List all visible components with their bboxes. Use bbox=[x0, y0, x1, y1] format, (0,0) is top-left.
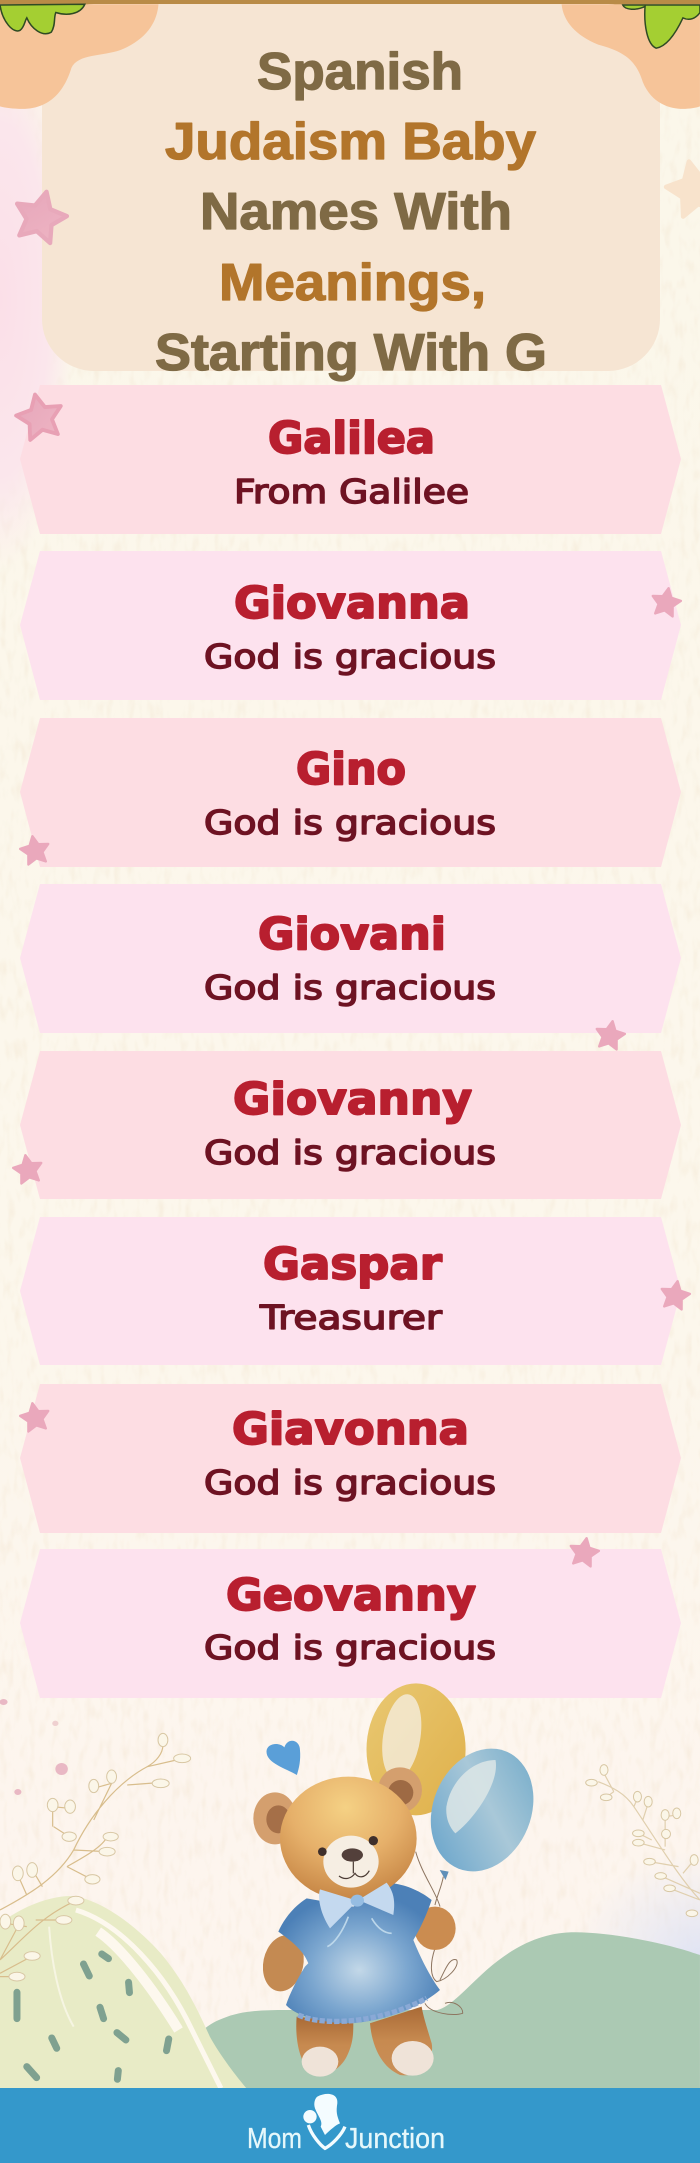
icon: blue heart bbox=[267, 1741, 300, 1775]
star: Gaspar bbox=[659, 1279, 692, 1310]
name: Gaspar bbox=[263, 1239, 442, 1290]
name: Giovanna bbox=[234, 578, 470, 629]
star: Galilea bbox=[13, 390, 66, 442]
hill dashes bbox=[17, 1954, 169, 2079]
eyes bbox=[318, 1847, 327, 1856]
icon: mother and child bbox=[303, 2094, 345, 2148]
panel: Giavonna bbox=[20, 1384, 681, 1533]
panel: Giovani bbox=[20, 884, 681, 1033]
mouth bbox=[339, 1862, 369, 1879]
star: Geovanny bbox=[568, 1536, 601, 1567]
name: Geovanny bbox=[226, 1570, 476, 1621]
star: Giovanny bbox=[11, 1153, 44, 1184]
title bbox=[155, 43, 547, 382]
meaning: From Galilee bbox=[234, 472, 469, 511]
star: Giovanna bbox=[650, 586, 683, 617]
meaning: God is gracious bbox=[204, 968, 496, 1007]
branch right bbox=[586, 1765, 700, 1917]
meaning: God is gracious bbox=[204, 803, 496, 842]
hill: dark green bbox=[192, 1932, 700, 2088]
panel: Galilea bbox=[20, 385, 681, 534]
name: Giovanny bbox=[233, 1074, 472, 1125]
name: Gino bbox=[296, 744, 406, 795]
arms bbox=[258, 1931, 309, 1995]
title: Spanish bbox=[257, 43, 463, 101]
meaning: Treasurer bbox=[259, 1298, 443, 1337]
star: title right bbox=[662, 156, 700, 219]
balloon strings bbox=[416, 1852, 463, 2015]
blue balloon bbox=[418, 1742, 546, 1880]
yellow balloon bbox=[366, 1683, 466, 1815]
leaves right bbox=[623, 5, 700, 48]
logo: MomJunction bbox=[247, 2094, 445, 2155]
dress bbox=[278, 1883, 440, 2023]
star: Giavonna bbox=[18, 1401, 51, 1432]
footer bar bbox=[0, 2088, 700, 2163]
title: Starting With G bbox=[155, 324, 547, 382]
star: Gino bbox=[18, 834, 51, 865]
dots bbox=[0, 1699, 68, 1795]
meaning: God is gracious bbox=[204, 1463, 496, 1502]
logo: MomJunction: Junction bbox=[345, 2123, 445, 2155]
branch left bbox=[0, 1733, 191, 1981]
feet bbox=[302, 2047, 338, 2077]
star: Giovani bbox=[594, 1019, 627, 1050]
head bbox=[280, 1777, 417, 1900]
meaning: God is gracious bbox=[204, 637, 496, 676]
orange corner left bbox=[0, 4, 158, 109]
title: Names With bbox=[200, 183, 512, 241]
title: Meanings, bbox=[219, 254, 486, 312]
name: Giovani bbox=[258, 909, 446, 960]
legs bbox=[296, 2017, 353, 2075]
star: title left bbox=[10, 186, 71, 245]
panel: Gino bbox=[20, 718, 681, 867]
meaning: God is gracious bbox=[204, 1133, 496, 1172]
name: Giavonna bbox=[232, 1404, 469, 1455]
nose bbox=[342, 1848, 363, 1862]
panel: Giovanny bbox=[20, 1051, 681, 1199]
wordmark: Mom bbox=[247, 2123, 302, 2155]
leaves left bbox=[0, 4, 85, 34]
muzzle bbox=[323, 1836, 379, 1888]
orange corner right bbox=[562, 4, 700, 109]
dress frill bbox=[298, 1998, 427, 2021]
top brown bar bbox=[0, 0, 700, 5]
panel: Geovanny bbox=[20, 1549, 681, 1698]
bottom scene bbox=[0, 1683, 700, 2088]
bow bbox=[319, 1883, 394, 1947]
hill stripes bbox=[76, 1910, 221, 2088]
title: Judaism Baby bbox=[165, 113, 536, 171]
bear bbox=[253, 1767, 463, 2077]
meaning: God is gracious bbox=[204, 1628, 496, 1667]
title panel background bbox=[42, 4, 660, 371]
hill: light yellow bbox=[0, 1896, 246, 2088]
ears bbox=[253, 1792, 297, 1844]
name: Galilea bbox=[268, 413, 435, 464]
panel: Giovanna bbox=[20, 551, 681, 700]
panel: Gaspar bbox=[20, 1217, 681, 1365]
